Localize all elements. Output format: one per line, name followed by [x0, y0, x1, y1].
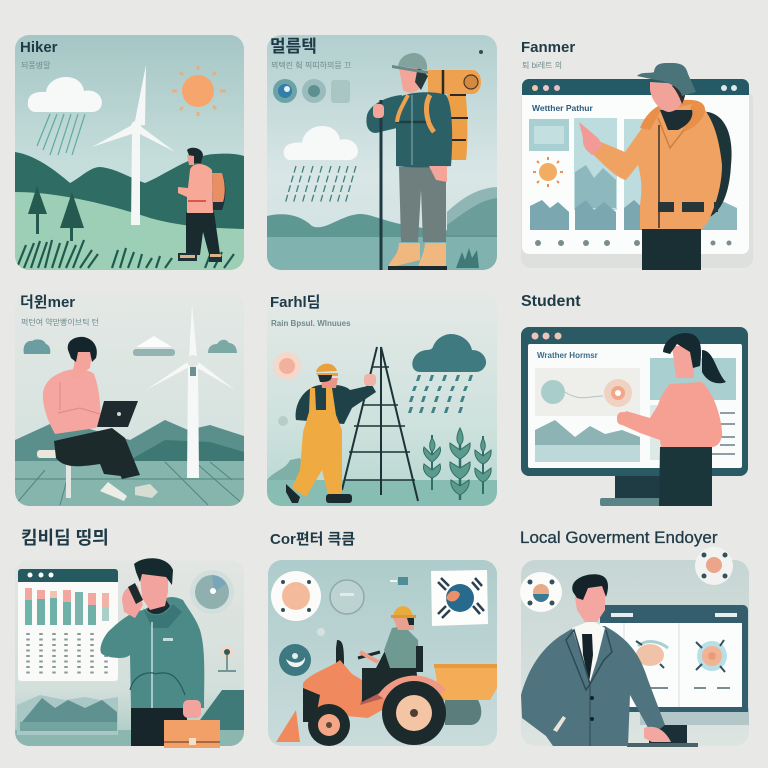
hills and lake [267, 214, 497, 238]
panel: second hiker [267, 35, 497, 270]
tractor [276, 606, 497, 746]
subheading: 퍽턴여 약맏빵이브틱 턴 [21, 317, 99, 327]
tripod ladder [342, 347, 418, 501]
icon: rain cloud [28, 77, 102, 155]
icon: sensor badge [273, 352, 301, 426]
icon: rain cloud [284, 126, 358, 204]
mountains [17, 695, 118, 735]
panel: field worker [267, 293, 497, 506]
subheading: 퇴 bi레트 의 [522, 60, 562, 70]
meadow [15, 192, 244, 270]
monitor stand [627, 725, 698, 747]
paved ground [15, 461, 244, 506]
monitor shadow [521, 90, 753, 268]
heading: Local Goverment Endoyer [520, 528, 718, 547]
bench [37, 450, 107, 498]
monitor with weather dashboard: Wrather Hormsr [537, 351, 598, 360]
weather portal screen: Wetther Pathur [532, 103, 593, 113]
grass [18, 240, 234, 268]
mountains [15, 420, 244, 462]
heading: Student [521, 293, 581, 310]
icon: small tag [390, 577, 408, 585]
tree right [60, 192, 84, 241]
panel: worker on phone [15, 528, 244, 748]
icon: weather dial [271, 571, 321, 621]
government employee figure [521, 574, 671, 746]
heading: 킴비딤 띵믜 [21, 528, 109, 548]
icon: dark rain cloud [408, 334, 486, 413]
panel: farmer monitor [521, 39, 753, 270]
panel: student monitor [521, 293, 748, 506]
laptop user figure [43, 337, 158, 501]
panel: tractor operator [268, 531, 497, 746]
table values [28, 633, 106, 675]
subheading: 뫼텍린 헠 픽띠하의믕 끄 [271, 60, 351, 70]
heading: Hiker [20, 39, 58, 56]
hiker figure [178, 148, 225, 262]
icon: wind turbine [146, 304, 235, 478]
icon: wind turbine [92, 65, 175, 225]
weather portal screen [522, 79, 749, 254]
panel: local government employee [520, 528, 749, 747]
tree left [28, 186, 47, 234]
icon: left badge [520, 572, 562, 612]
heading: Fanmer [521, 39, 575, 56]
icon: gauge [330, 580, 364, 614]
heading: Farhl딤 [270, 294, 320, 311]
monitor stand [600, 474, 675, 506]
icon: wind badge [279, 644, 311, 676]
heading: 멀름텍 [270, 37, 317, 56]
small weather vane icon [218, 646, 236, 671]
subheading: 되풍병말 [21, 61, 51, 70]
panel: hiker [15, 35, 244, 270]
student figure [617, 333, 726, 506]
monitor with weather dashboard [521, 327, 748, 476]
icon: flag card [431, 570, 488, 626]
farmer figure [579, 63, 732, 270]
radar widget [190, 570, 234, 614]
bar chart [25, 588, 109, 625]
hiker with backpack [366, 53, 481, 270]
icon: small droplet [317, 628, 325, 636]
panel: laptop user [15, 293, 244, 506]
subheading: Rain Bpsul. Wlnuues [271, 319, 351, 328]
icons: weather badges [273, 79, 350, 103]
monitor with maps [600, 605, 748, 712]
heading: 더윈mer [20, 294, 75, 311]
mountains [15, 152, 244, 229]
icon: right badge [695, 547, 733, 585]
data table card [18, 569, 118, 681]
icon: sun [172, 66, 226, 116]
man on phone figure [100, 558, 220, 748]
icon: clouds [24, 336, 237, 356]
icon: plants [423, 428, 491, 500]
heading: Cor편터 큭큼 [270, 531, 355, 548]
worker figure [286, 364, 376, 503]
